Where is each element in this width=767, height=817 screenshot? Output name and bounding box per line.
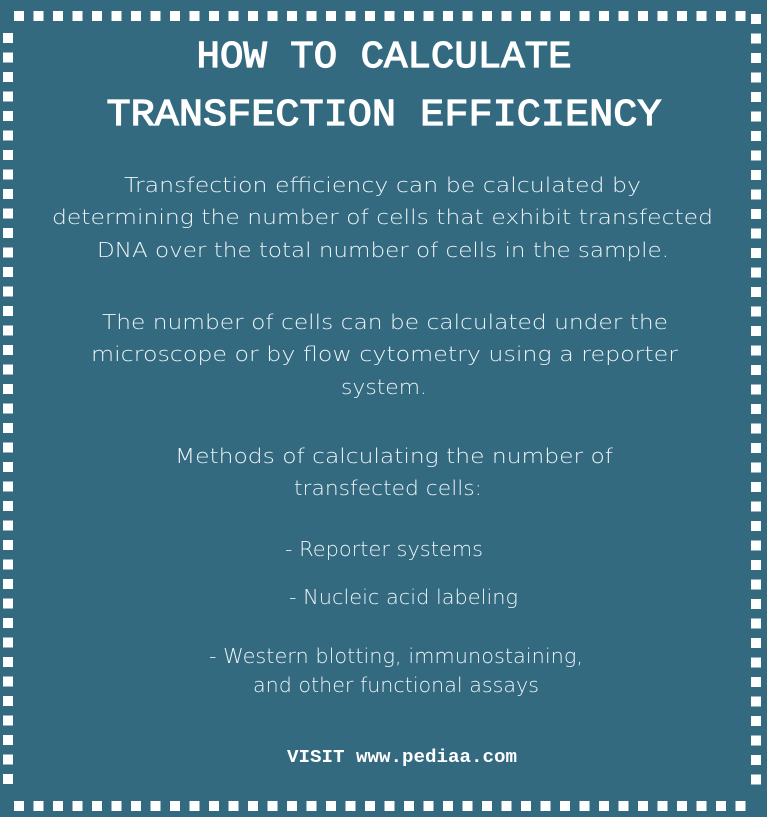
methods list: - Reporter systems — [285, 537, 483, 561]
body text: DNA over the total number of cells in the sample. — [97, 238, 669, 262]
border: top dotted row — [14, 11, 754, 21]
methods list: - Nucleic acid labeling — [289, 585, 518, 609]
border: bottom dotted row — [14, 801, 754, 811]
body text: microscope or by flow cytometry using a reporter — [91, 342, 679, 366]
body text: system. — [341, 375, 427, 399]
body text: Transfection efficiency can be calculated by — [124, 173, 641, 197]
border: left dotted column — [3, 33, 13, 793]
methods list: Methods of calculating the number of — [175, 444, 613, 468]
footer: visit link: VISIT www.pediaa.com — [287, 748, 517, 768]
methods list — [175, 444, 613, 697]
body text: determining the number of cells that exhibit transfected — [52, 205, 713, 229]
border: right dotted column — [751, 14, 761, 790]
methods list: and other functional assays — [253, 673, 539, 697]
title — [106, 36, 662, 137]
body text: The number of cells can be calculated under the — [102, 310, 668, 334]
body text — [52, 173, 713, 399]
title: HOW TO CALCULATE — [196, 36, 572, 79]
methods list: transfected cells: — [294, 476, 482, 500]
methods list: - Western blotting, immunostaining, — [209, 644, 583, 668]
title: TRANSFECTION EFFICIENCY — [106, 94, 662, 137]
